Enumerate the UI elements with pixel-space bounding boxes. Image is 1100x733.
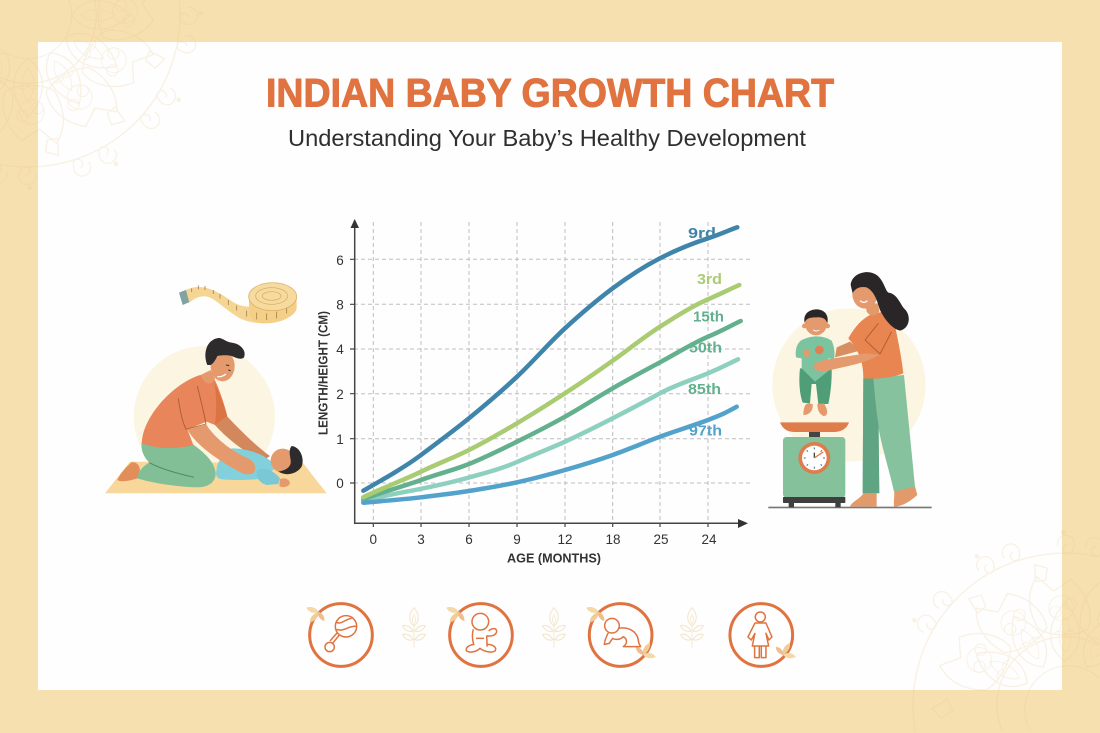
baby lying on mat <box>216 446 303 487</box>
y axis title: LENGTH/HEIGHT (CM) <box>316 311 330 435</box>
background circle <box>772 308 926 462</box>
x axis tick labels <box>370 532 717 547</box>
x axis tick labels: 18 <box>605 532 621 547</box>
y axis tick labels: 2 <box>336 387 344 402</box>
icon: crawling baby <box>586 604 656 666</box>
percentile labels <box>688 225 724 440</box>
father <box>117 338 270 487</box>
x axis tick labels: 24 <box>701 532 717 547</box>
x axis tick labels: 6 <box>465 532 473 547</box>
ground line <box>768 507 932 508</box>
icon: child standing <box>730 604 796 666</box>
y axis tick labels: 6 <box>336 253 344 268</box>
x axis tick labels: 12 <box>557 532 573 547</box>
y axis tick labels: 0 <box>336 476 344 491</box>
growth chart <box>316 219 750 566</box>
illustration: mother weighing baby <box>768 272 932 508</box>
x axis tick labels: 0 <box>370 532 377 547</box>
mother front arm <box>813 353 879 372</box>
decorative mandala: bottom right <box>896 527 1100 733</box>
scale dial <box>798 442 830 474</box>
percentile labels: 15th <box>693 308 724 326</box>
icon: rattle <box>306 604 372 666</box>
y axis tick labels: 8 <box>336 298 344 312</box>
percentile labels: 85th <box>688 381 721 398</box>
x axis tick labels: 3 <box>417 532 425 547</box>
percentile labels: 3rd <box>697 271 722 288</box>
mat <box>105 462 327 493</box>
percentile labels: 9rd <box>688 225 716 242</box>
percentile labels: 50th <box>689 340 722 356</box>
subtitle: Understanding Your Baby’s Healthy Development <box>288 125 807 151</box>
mother <box>835 272 917 507</box>
icon: wheat sprig <box>543 608 565 648</box>
baby held above scale <box>796 309 835 416</box>
percentile curves <box>363 227 741 503</box>
bottom icon row <box>306 604 796 666</box>
scale <box>780 422 849 507</box>
chart grid <box>354 222 750 523</box>
percentile labels: 97th <box>689 422 722 440</box>
father front arm <box>187 424 255 474</box>
x axis tick labels: 9 <box>513 532 521 547</box>
decorative mandala: top left <box>0 0 206 193</box>
chart axes <box>350 219 748 528</box>
illustration: father measuring baby <box>105 283 327 493</box>
icon: sitting baby <box>446 604 512 666</box>
x axis title: AGE (MONTHS) <box>507 552 601 566</box>
y axis tick labels: 4 <box>336 342 344 357</box>
icon: measuring tape <box>179 283 297 323</box>
background circle <box>134 346 275 487</box>
y axis tick labels <box>336 253 344 491</box>
x axis tick labels: 25 <box>653 532 669 547</box>
icon: wheat sprig <box>681 608 703 648</box>
title: INDIAN BABY GROWTH CHART <box>266 72 834 116</box>
y axis tick labels: 1 <box>336 432 344 447</box>
icon: wheat sprig <box>403 608 425 648</box>
